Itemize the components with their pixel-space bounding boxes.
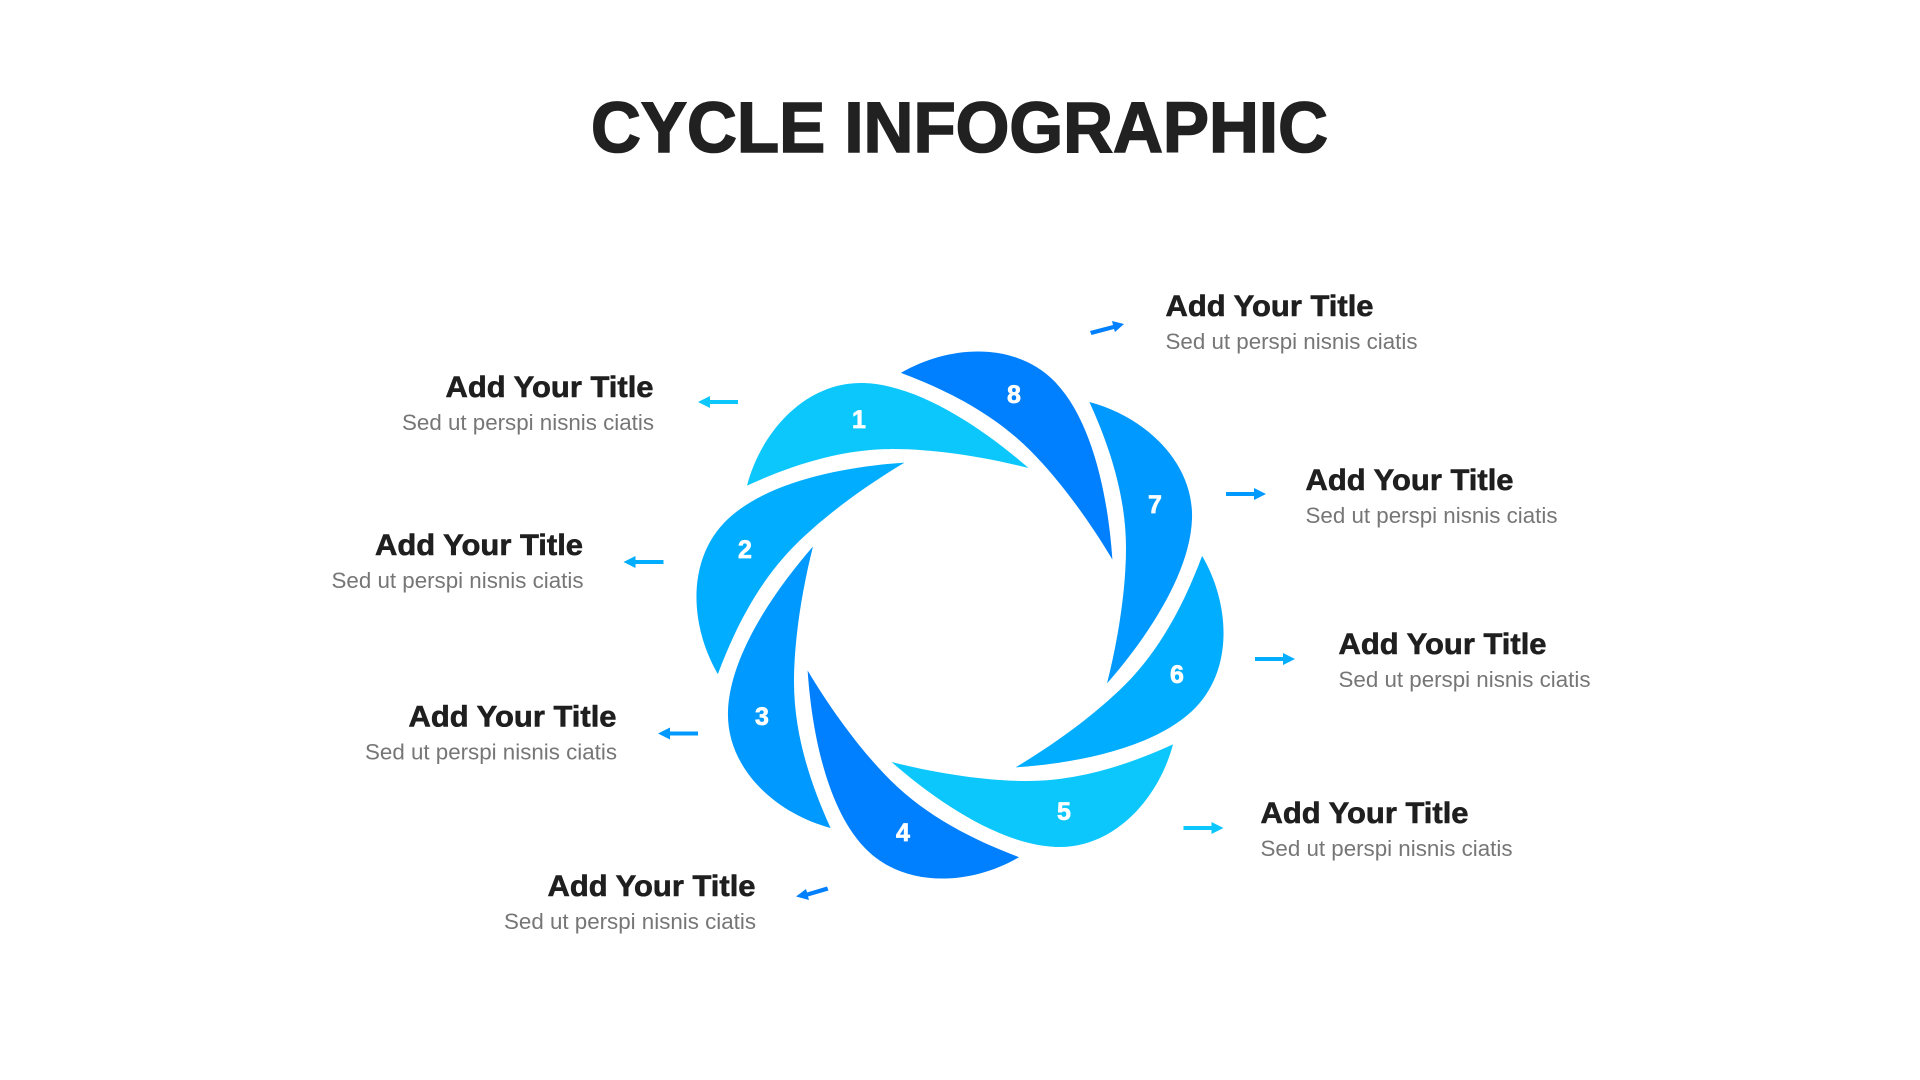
arrow 3	[658, 728, 698, 740]
label 7: Sed ut perspi nisnis ciatis	[1306, 503, 1558, 528]
label 6	[1338, 628, 1590, 692]
label 4: Add Your Title	[548, 870, 756, 903]
label 3: Sed ut perspi nisnis ciatis	[365, 740, 617, 764]
label 8	[1166, 290, 1418, 354]
label 8: Add Your Title	[1166, 290, 1374, 323]
label 7: Add Your Title	[1306, 464, 1514, 497]
arrow 2	[624, 556, 664, 568]
petal 5: 5	[1057, 798, 1071, 826]
label 6: Add Your Title	[1338, 628, 1546, 661]
label 1: Sed ut perspi nisnis ciatis	[402, 410, 654, 435]
petal 1	[747, 383, 1028, 486]
label 6: Sed ut perspi nisnis ciatis	[1338, 667, 1590, 692]
arrow 7	[1226, 488, 1266, 500]
petal 2: 2	[738, 536, 752, 564]
petal 4	[747, 658, 1019, 930]
arrow 5	[1184, 822, 1224, 834]
arrow 1	[698, 396, 738, 408]
label 1: Add Your Title	[446, 371, 654, 404]
petal 4: 4	[896, 819, 910, 847]
petal 3	[728, 546, 831, 828]
title: CYCLE INFOGRAPHIC	[591, 89, 1328, 168]
label 3	[365, 700, 617, 764]
arrow 6	[1255, 653, 1295, 665]
label 2: Add Your Title	[375, 529, 583, 562]
cycle diagram	[645, 300, 1275, 930]
petal 6: 6	[1170, 661, 1184, 689]
label 8: Sed ut perspi nisnis ciatis	[1166, 329, 1418, 354]
petal 8	[901, 300, 1173, 572]
petal 6	[1003, 556, 1275, 828]
label 7	[1306, 464, 1558, 528]
label 2: Sed ut perspi nisnis ciatis	[332, 568, 584, 593]
petal 2	[645, 402, 917, 674]
petal 7: 7	[1148, 491, 1162, 519]
arrow 4	[796, 886, 828, 900]
label 5	[1260, 797, 1512, 861]
label 1	[402, 371, 654, 435]
petal 5	[892, 744, 1173, 847]
label 5: Sed ut perspi nisnis ciatis	[1260, 836, 1512, 861]
petal 8: 8	[1007, 381, 1021, 409]
label 3: Add Your Title	[408, 700, 616, 734]
label 4: Sed ut perspi nisnis ciatis	[504, 909, 756, 934]
arrow 8	[1090, 321, 1124, 335]
petal 7	[1089, 402, 1192, 684]
petal 1: 1	[852, 406, 866, 434]
label 5: Add Your Title	[1260, 797, 1468, 830]
petal 3: 3	[755, 703, 769, 731]
label 2	[332, 529, 584, 593]
label 4	[504, 870, 756, 934]
